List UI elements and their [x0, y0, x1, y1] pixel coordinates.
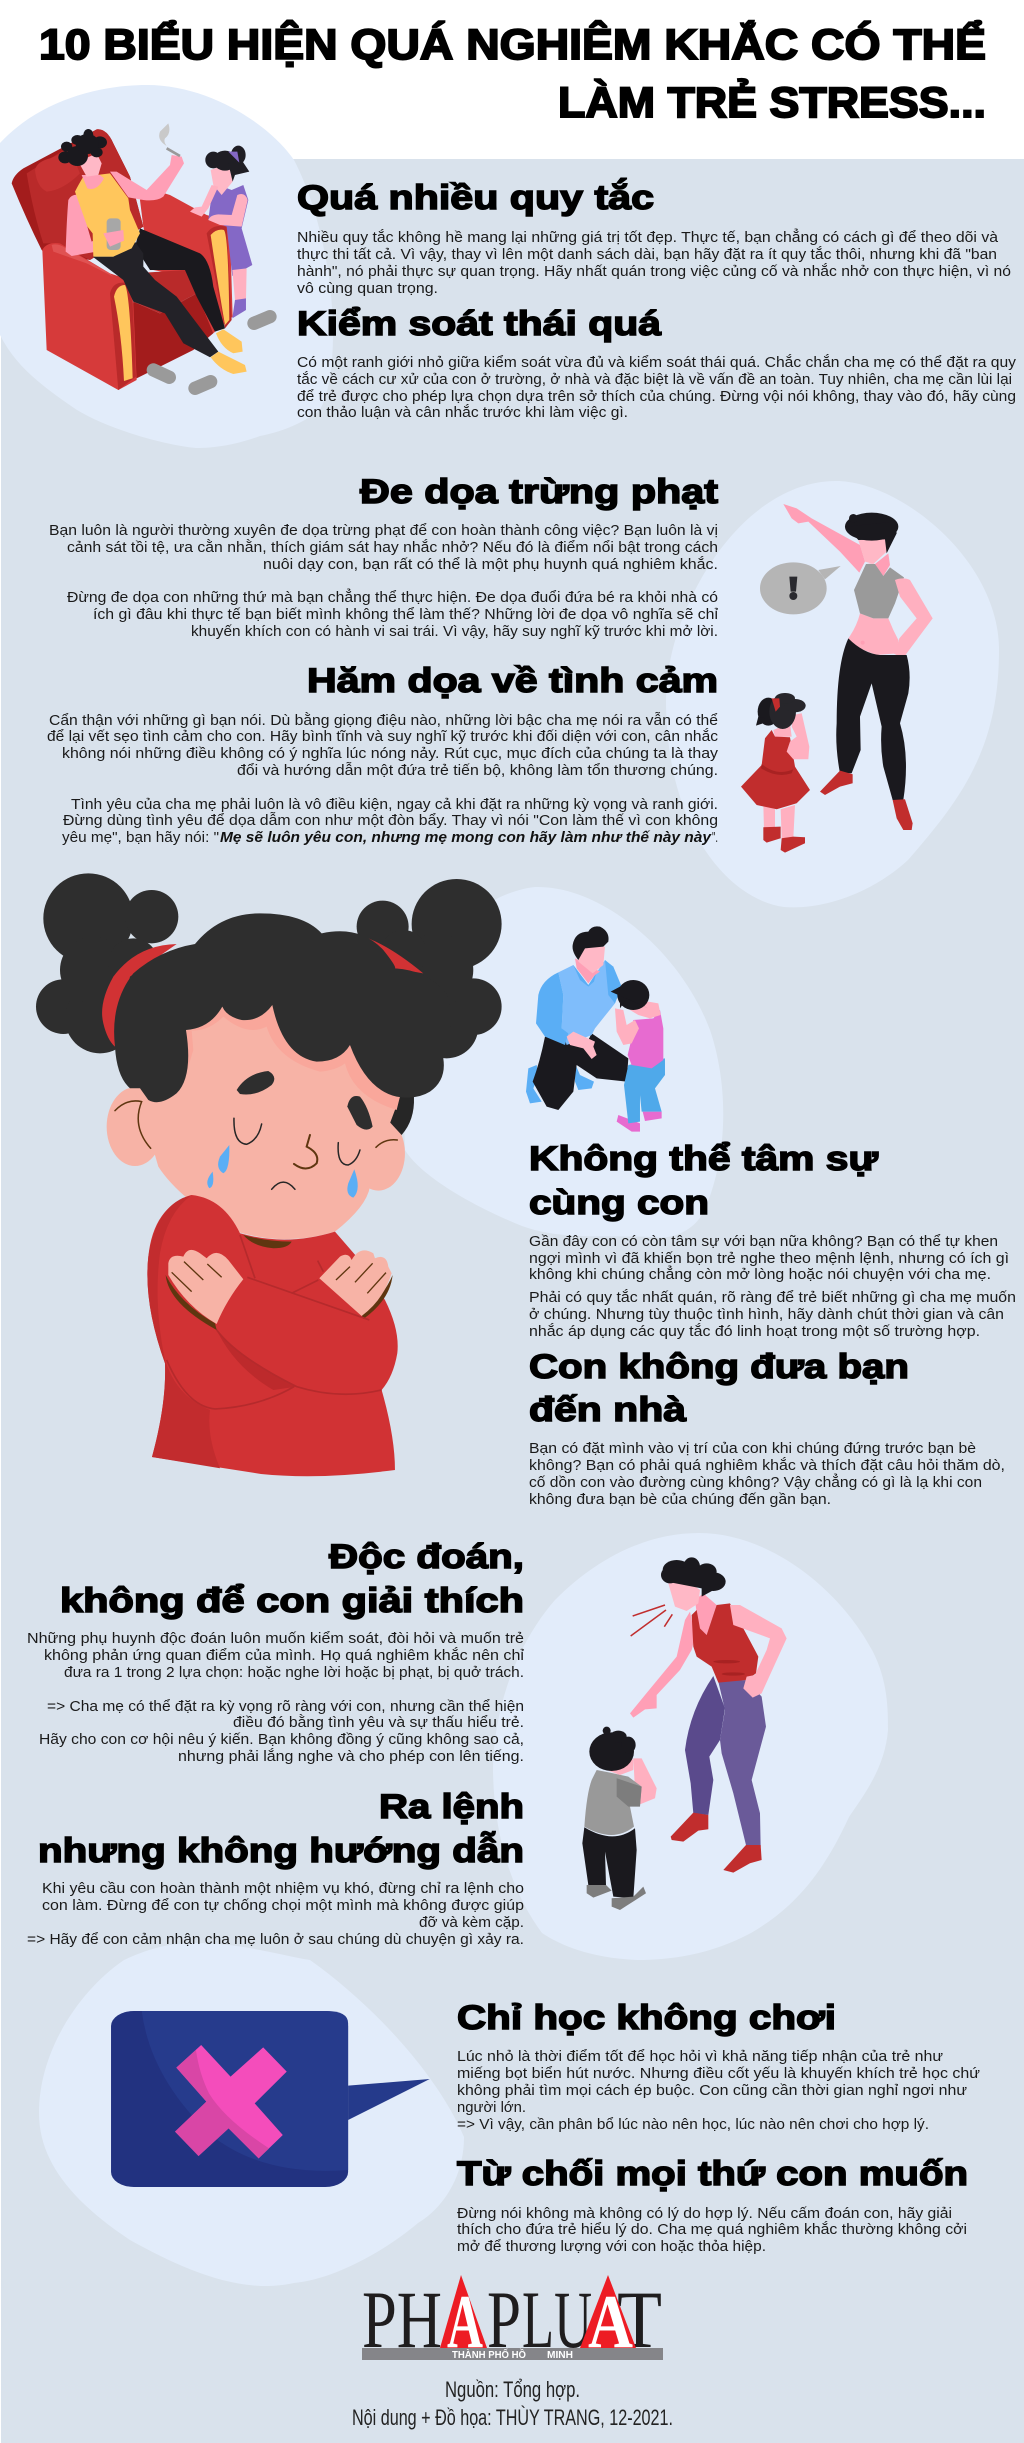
- text: Hăm dọa về tình cảm: Cẩn thận với những gì bạn nói. Dù bằng giọng điệu nào, những lời bậc cha mẹ nói ra vẫn có thể: [49, 712, 718, 729]
- text: Không thể tâm sự cùng con: Phải có quy tắc nhất quán, rõ ràng để trẻ biết những gì cha mẹ muốn: [529, 1289, 1016, 1306]
- heading: Không thể tâm sự cùng con: cùng con: [529, 1184, 709, 1222]
- logo: Pháp Luật: PH: [362, 2274, 442, 2365]
- text: Quá nhiều quy tắc: Nhiều quy tắc không hề mang lại những giá trị tốt đẹp. Thực tế, bạn chẳng có cách gì để theo dõi và: [297, 228, 999, 246]
- text: Quá nhiều quy tắc: hành", nó phải thực sự quan trọng. Hãy nhất quán trong việc củng cố và nhắc nhở con thực hiện, vì nó: [297, 263, 1011, 280]
- source and credits: Nội dung + Đồ họa: THÙY TRANG, 12-2021.: [352, 2405, 673, 2430]
- heading: Chỉ học không chơi: Chỉ học không chơi: [457, 1999, 836, 2037]
- heading: Không thể tâm sự cùng con: [529, 1140, 878, 1222]
- text: Đe dọa trừng phạt: khuyến khích con có hành vi sai trái. Vì vậy, hãy suy nghĩ kỹ trước khi mở lời.: [191, 624, 718, 640]
- source and credits: Nguồn: Tổng hợp.: [445, 2377, 580, 2402]
- text: Ra lệnh nhưng không hướng dẫn: => Hãy để con cảm nhận cha mẹ luôn ở sau chúng dù chuyện gì xảy ra.: [27, 1932, 524, 1948]
- logo: Pháp Luật: P: [487, 2274, 521, 2365]
- text: Không thể tâm sự cùng con: Gần đây con có còn tâm sự với bạn nữa không? Bạn có thể tự khen: [529, 1234, 998, 1250]
- text: Chỉ học không chơi: => Vì vậy, cần phân bổ lúc nào nên học, lúc nào nên chơi cho hợp lý.: [457, 2117, 929, 2133]
- title: [39, 20, 986, 127]
- text: Con không đưa bạn đến nhà: không đưa bạn bè của chúng đến gần bạn.: [529, 1492, 831, 1508]
- text: Ra lệnh nhưng không hướng dẫn: con làm. Đừng để con tự chống chọi một mình mà không được giúp: [42, 1898, 524, 1914]
- text: Đe dọa trừng phạt: [49, 523, 719, 640]
- logo: Pháp Luật: LU: [522, 2274, 592, 2365]
- text: Hăm dọa về tình cảm: để lại vết sẹo tình cảm cho con. Hãy bình tĩnh và suy nghĩ kỹ trước khi đối diện với con, cân nhắc: [47, 728, 718, 745]
- heading: Con không đưa bạn đến nhà: đến nhà: [529, 1391, 686, 1429]
- text: Không thể tâm sự cùng con: nhắc áp dụng các quy tắc đó linh hoạt trong một số trường hợp.: [529, 1323, 980, 1340]
- text: Đe dọa trừng phạt: Bạn luôn là người thường xuyên đe dọa trừng phạt để con hoàn thành công việc? Bạn luôn là vị: [49, 523, 718, 539]
- text: Độc đoán, không để con giải thích: Những phụ huynh độc đoán luôn muốn kiểm soát, đòi hỏi và muốn trẻ: [27, 1631, 524, 1647]
- text: Hăm dọa về tình cảm: Đừng dùng tình yêu để dọa dẫm con như một đòn bẩy. Thay vì nói "Con làm thế vì con không: [63, 812, 718, 829]
- icon: speech bubble with pink X: [111, 2011, 430, 2187]
- heading: Con không đưa bạn đến nhà: [529, 1348, 909, 1429]
- text: Không thể tâm sự cùng con: [529, 1234, 1016, 1340]
- text: Kiểm soát thái quá: tắc về cách cư xử của con ở trường, ở nhà và đặc biệt là về vấn đề an toàn. Tuy nhiên, cha mẹ cần lùi lại: [297, 371, 1012, 388]
- heading: Hăm dọa về tình cảm: Hăm dọa về tình cảm: [307, 662, 718, 700]
- logo: Pháp Luật: THÀNH PHỐ HỒ: [452, 2347, 526, 2361]
- text: Hăm dọa về tình cảm: Mẹ sẽ luôn yêu con, nhưng mẹ mong con hãy làm như thế này này: [220, 830, 712, 846]
- text: Chỉ học không chơi: Lúc nhỏ là thời điểm tốt để học hỏi vì khả năng tiếp nhận của trẻ như: [457, 2049, 943, 2065]
- heading: Độc đoán, không để con giải thích: Độc đoán,: [329, 1538, 524, 1576]
- text: Hăm dọa về tình cảm: không nói những điều không có ý nghĩa lúc nóng nảy. Rút cục, mục đích của chúng ta là thay: [62, 746, 719, 762]
- text: Độc đoán, không để con giải thích: nhưng phải lắng nghe và cho phép con lên tiếng.: [178, 1748, 524, 1765]
- text: Con không đưa bạn đến nhà: [529, 1441, 1005, 1508]
- illustration: mother in armchair with child: [12, 123, 270, 390]
- text: Độc đoán, không để con giải thích: đưa ra 1 trong 2 lựa chọn: hoặc nghe lời hoặc bị phạt, bị quở trách.: [64, 1665, 524, 1681]
- logo: Pháp Luật: A: [447, 2280, 483, 2364]
- text: Hăm dọa về tình cảm: [47, 712, 719, 846]
- text: Ra lệnh nhưng không hướng dẫn: Khi yêu cầu con hoàn thành một nhiệm vụ khó, đừng chỉ ra lệnh cho: [42, 1881, 524, 1897]
- text: Từ chối mọi thứ con muốn: [457, 2206, 967, 2255]
- text: Quá nhiều quy tắc: thực thi tất cả. Vì vậy, thay vì lên một danh sách dài, bạn hãy đặt ra ít quy tắc thôi, nhưng khi đã "ban: [297, 246, 997, 263]
- text: Đe dọa trừng phạt: Đừng đe dọa con những thứ mà bạn chẳng thể thực hiện. Đe dọa đuổi đứa bé ra khỏi nhà có: [67, 588, 718, 606]
- text: Không thể tâm sự cùng con: không khi chúng chẳng còn mở lòng hoặc nói chuyện với cha mẹ.: [529, 1265, 991, 1283]
- text: Kiểm soát thái quá: [297, 354, 1017, 421]
- text: Con không đưa bạn đến nhà: không? Bạn có phải quá nghiêm khắc và thích đặt câu hỏi thăm dò,: [529, 1457, 1005, 1474]
- text: Không thể tâm sự cùng con: ngợi mình vì đã khiến bọn trẻ nghe theo mệnh lệnh, nhưng có ích gì: [529, 1251, 1009, 1267]
- text: Chỉ học không chơi: [457, 2049, 980, 2133]
- text: Hăm dọa về tình cảm: ".: [712, 830, 718, 846]
- logo: Pháp Luật: A: [588, 2280, 633, 2364]
- text: Độc đoán, không để con giải thích: => Cha mẹ có thể đặt ra kỳ vọng rõ ràng với con, nhưng cần thể hiện: [47, 1699, 524, 1715]
- text: Độc đoán, không để con giải thích: [27, 1631, 525, 1765]
- text: Đe dọa trừng phạt: nuôi dạy con, bạn rất có thể là một phụ huynh quá nghiêm khắc.: [263, 556, 718, 573]
- text: Đe dọa trừng phạt: cảnh sát tồi tệ, ưa cằn nhằn, thích giám sát hay nhắc nhở? Nếu đó là điểm nổi bật trong cách: [67, 539, 718, 556]
- heading: Kiểm soát thái quá: Kiểm soát thái quá: [297, 305, 661, 343]
- text: Độc đoán, không để con giải thích: điều đó bằng tình yêu và sự thấu hiểu trẻ.: [233, 1714, 524, 1731]
- text: Không thể tâm sự cùng con: ở chúng. Nhưng tùy thuộc tình hình, hãy dành chút thời gian và cân: [529, 1307, 1004, 1323]
- text: Ra lệnh nhưng không hướng dẫn: [27, 1881, 524, 1948]
- logo: Pháp Luật: [362, 2274, 663, 2365]
- text: Ra lệnh nhưng không hướng dẫn: đỡ và kèm cặp.: [419, 1915, 524, 1931]
- logo: Pháp Luật: MINH: [547, 2350, 573, 2361]
- text: Chỉ học không chơi: miếng bọt biển hút nước. Nhưng điều cốt yếu là khuyến khích trẻ học chứ: [457, 2066, 980, 2082]
- text: Từ chối mọi thứ con muốn: thích cho đứa trẻ hiểu lý do. Cha mẹ quá nghiêm khắc thường không cởi: [457, 2221, 967, 2238]
- icon: speech bubble with exclamation: [760, 562, 841, 614]
- title: LÀM TRẺ STRESS...: [558, 78, 986, 127]
- illustration: crying girl: [36, 873, 502, 1476]
- text: Độc đoán, không để con giải thích: Hãy cho con cơ hội nêu ý kiến. Bạn không đồng ý cũng không sao cả,: [39, 1732, 524, 1748]
- illustration: father comforting daughter: [526, 926, 665, 1132]
- text: Quá nhiều quy tắc: vô cùng quan trọng.: [297, 281, 438, 297]
- text: Kiểm soát thái quá: Có một ranh giới nhỏ giữa kiểm soát vừa đủ và kiểm soát thái quá. Chắc chắn cha mẹ có thể đặt ra quy: [297, 354, 1017, 371]
- text: Hăm dọa về tình cảm: Tình yêu của cha mẹ phải luôn là vô điều kiện, ngay cả khi đặt ra những kỳ vọng và ranh giới.: [71, 797, 718, 813]
- text: Quá nhiều quy tắc: [297, 228, 1011, 297]
- illustration: mother pointing, crying girl: [741, 504, 933, 853]
- heading: Con không đưa bạn đến nhà: Con không đưa bạn: [529, 1348, 909, 1386]
- text: Chỉ học không chơi: không phải tìm mọi cách ép buộc. Con cũng cần thời gian nghỉ ngơi như: [457, 2083, 967, 2099]
- source and credits: [352, 2377, 673, 2430]
- text: Hăm dọa về tình cảm: yêu mẹ", bạn hãy nói: ": [62, 830, 219, 846]
- text: Từ chối mọi thứ con muốn: Đừng nói không mà không có lý do hợp lý. Nếu cấm đoán con, hãy giải: [457, 2206, 952, 2222]
- heading: Độc đoán, không để con giải thích: không để con giải thích: [60, 1582, 524, 1620]
- heading: Từ chối mọi thứ con muốn: Từ chối mọi thứ con muốn: [457, 2155, 968, 2193]
- heading: Đe dọa trừng phạt: Đe dọa trừng phạt: [360, 473, 718, 511]
- text: Con không đưa bạn đến nhà: cố dồn con vào đường cùng không? Vậy chẳng có gì là lạ khi con: [529, 1473, 982, 1491]
- heading: Quá nhiều quy tắc: Quá nhiều quy tắc: [297, 179, 654, 217]
- text: Chỉ học không chơi: người lớn.: [457, 2100, 526, 2116]
- heading: Không thể tâm sự cùng con: Không thể tâm sự: [529, 1140, 878, 1178]
- heading: Độc đoán, không để con giải thích: [60, 1538, 524, 1620]
- illustration: mother scolding boy: [582, 1557, 787, 1910]
- text: Độc đoán, không để con giải thích: không phản ứng quan điểm của mình. Họ quá nghiêm khắc nên chỉ: [44, 1647, 525, 1664]
- text: Từ chối mọi thứ con muốn: mở để thương lượng với con hoặc thỏa hiệp.: [457, 2239, 766, 2255]
- text: Con không đưa bạn đến nhà: Bạn có đặt mình vào vị trí của con khi chúng đứng trước bạn bè: [529, 1441, 976, 1457]
- title: 10 BIỂU HIỆN QUÁ NGHIÊM KHẮC CÓ THỂ: [39, 20, 986, 69]
- text: Đe dọa trừng phạt: ích gì đâu khi thực tế bạn biết mình không thể làm thế? Những lời đe dọa vô nghĩa sẽ chỉ: [93, 607, 719, 623]
- heading: Ra lệnh nhưng không hướng dẫn: [38, 1788, 524, 1870]
- heading: Ra lệnh nhưng không hướng dẫn: Ra lệnh: [379, 1788, 524, 1826]
- text: Kiểm soát thái quá: để trẻ được cho phép lựa chọn dựa trên sở thích của chúng. Đừng vội nói không, thay vào đó, hãy cùng: [297, 389, 1016, 405]
- text: Kiểm soát thái quá: con thảo luận và cân nhắc trước khi làm việc gì.: [297, 404, 628, 421]
- logo: Pháp Luật: T: [617, 2274, 662, 2365]
- heading: Ra lệnh nhưng không hướng dẫn: nhưng không hướng dẫn: [38, 1832, 524, 1870]
- text: Hăm dọa về tình cảm: đổi và hướng dẫn một đứa trẻ tiến bộ, không làm tổn thương chúng.: [237, 762, 718, 779]
